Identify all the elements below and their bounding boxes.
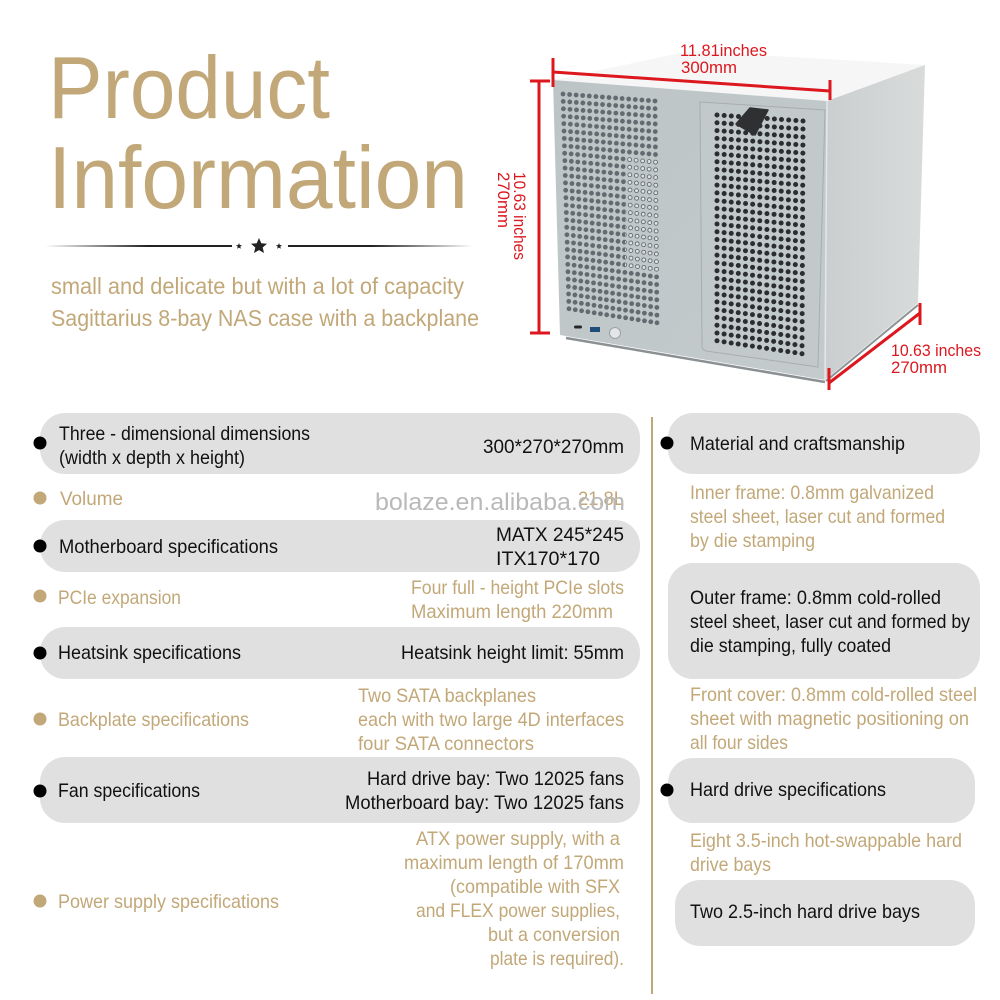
title: Product Information: Product: [48, 38, 330, 137]
row: backplate: [34, 685, 624, 755]
row: fan: Fan specifications: [58, 780, 200, 802]
row: backplate: four SATA connectors: [358, 733, 534, 755]
dimension: width: [553, 41, 830, 100]
row: power supply: (compatible with SFX: [450, 876, 620, 898]
right: inner frame: Inner frame: 0.8mm galvanized: [690, 482, 934, 504]
pull tab: [736, 108, 768, 135]
dimension: width: 11.81inches: [680, 41, 767, 60]
right: front cover: all four sides: [690, 732, 788, 754]
light showing through left vent: [625, 158, 658, 271]
row: volume: [34, 488, 624, 510]
dimension: height: 10.63 inches: [510, 172, 529, 260]
dimension: depth: 270mm: [891, 358, 947, 377]
right: hard drive heading: Hard drive specifications: [690, 779, 886, 801]
right: front cover: [690, 684, 977, 754]
dimension: width: 300mm: [681, 58, 737, 77]
dimension: height: [494, 81, 550, 333]
row: motherboard: Motherboard specifications: [59, 536, 278, 558]
row: power supply: plate is required).: [490, 948, 624, 970]
right: front cover: Front cover: 0.8mm cold-rolled steel: [690, 684, 977, 706]
right: hard drive heading: [660, 758, 975, 823]
watermark: bolaze.en.alibaba.com: [375, 489, 625, 516]
divider with stars: [45, 238, 473, 253]
right: outer frame: die stamping, fully coated: [690, 635, 891, 657]
right: 2.5-inch bays: [675, 880, 975, 946]
subtitle: small and delicate but with a lot of capacity: [51, 273, 464, 299]
right: outer frame: Outer frame: 0.8mm cold-rolled: [690, 587, 941, 609]
row: backplate: each with two large 4D interfaces: [358, 709, 624, 731]
right: 3.5-inch bays: Eight 3.5-inch hot-swappable hard: [690, 830, 962, 852]
right: outer frame: [668, 563, 980, 679]
right: outer frame: steel sheet, laser cut and formed by: [690, 611, 970, 633]
row: power supply: ATX power supply, with a: [416, 828, 620, 850]
row: heatsink: Heatsink specifications: [58, 642, 241, 664]
dimension: depth: 10.63 inches: [891, 341, 981, 360]
title: Product Information: [48, 38, 468, 227]
column divider: [651, 417, 653, 994]
row: PCIe: Maximum length 220mm: [411, 601, 613, 623]
row: dimensions: 300*270*270mm: [483, 436, 624, 458]
row: fan: [34, 757, 640, 823]
right: 3.5-inch bays: drive bays: [690, 854, 771, 876]
row: backplate: Two SATA backplanes: [358, 685, 536, 707]
right: inner frame: steel sheet, laser cut and formed: [690, 506, 945, 528]
right: 2.5-inch bays: Two 2.5-inch hard drive bays: [690, 901, 920, 923]
left vent grid: [563, 94, 657, 323]
front ports: [574, 326, 620, 338]
row: heatsink: [34, 627, 640, 679]
right: material heading: [660, 413, 980, 474]
row: volume: Volume: [60, 488, 123, 510]
row: PCIe: [34, 577, 624, 623]
row: power supply: [34, 828, 624, 970]
right: inner frame: by die stamping: [690, 530, 815, 552]
row: fan: Motherboard bay: Two 12025 fans: [345, 792, 624, 814]
row: heatsink: Heatsink height limit: 55mm: [401, 642, 624, 664]
right: front cover: sheet with magnetic positioning on: [690, 708, 969, 730]
dimension: height: 270mm: [494, 172, 513, 228]
row: backplate: Backplate specifications: [58, 709, 249, 731]
right: inner frame: [690, 482, 945, 552]
subtitle: Sagittarius 8-bay NAS case with a backplane: [51, 305, 479, 331]
subtitle: [51, 273, 479, 331]
row: power supply: but a conversion: [488, 924, 620, 946]
row: motherboard: [34, 520, 640, 572]
right: 3.5-inch bays: [690, 830, 962, 876]
row: dimensions: Three - dimensional dimensions: [59, 423, 310, 445]
row: fan: Hard drive bay: Two 12025 fans: [367, 768, 624, 790]
row: dimensions: [34, 413, 640, 474]
row: PCIe: Four full - height PCIe slots: [411, 577, 624, 599]
row: volume: 21.8L: [578, 488, 624, 510]
row: PCIe: PCIe expansion: [58, 587, 181, 609]
row: power supply: and FLEX power supplies,: [416, 900, 620, 922]
product photo: NAS case: [553, 51, 925, 382]
row: power supply: Power supply specifications: [58, 891, 279, 913]
dimension: depth: [829, 303, 981, 390]
right vent grid: [717, 115, 803, 354]
right: material heading: Material and craftsmanship: [690, 433, 905, 455]
drive door panel: [700, 102, 825, 367]
row: motherboard: ITX170*170: [496, 548, 600, 570]
row: power supply: maximum length of 170mm: [404, 852, 624, 874]
row: motherboard: MATX 245*245: [496, 524, 624, 546]
title: Product Information: Information: [48, 128, 468, 227]
row: dimensions: (width x depth x height): [59, 447, 245, 469]
